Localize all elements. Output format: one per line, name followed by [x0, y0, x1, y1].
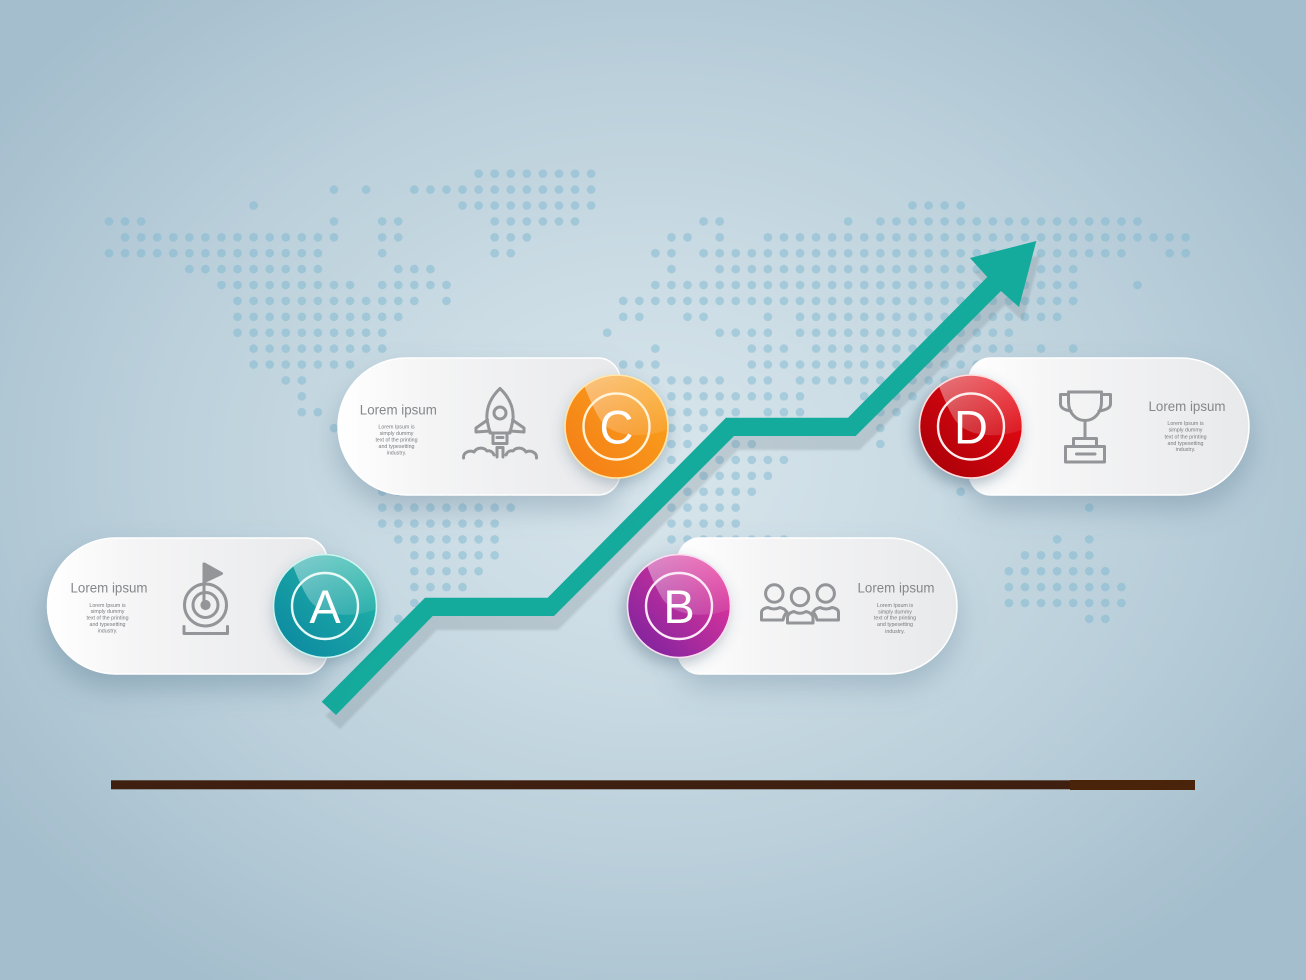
- panel: step B: [622, 538, 959, 688]
- badge A: [273, 554, 377, 664]
- icon: trophy: [1060, 392, 1110, 462]
- growth arrow: [322, 241, 1036, 715]
- badge C: C: [600, 400, 633, 454]
- body text A: text of the printing: [86, 616, 129, 622]
- card B: [678, 538, 957, 674]
- body text C: and typesetting: [379, 444, 415, 450]
- icon: target with flag: [184, 564, 228, 634]
- badge C: [564, 375, 668, 484]
- body text B: industry.: [885, 629, 905, 635]
- badge B: [622, 554, 731, 665]
- body text D: simply dummy: [1169, 428, 1203, 434]
- heading D: Lorem ipsum: [1148, 398, 1226, 414]
- body text B: and typesetting: [877, 622, 913, 628]
- icon: team of people: [762, 585, 838, 623]
- arrow shadow: [326, 255, 1040, 729]
- body text D: industry.: [1176, 447, 1195, 453]
- card A: [47, 538, 327, 674]
- panel: step D: [914, 358, 1251, 509]
- card D: [969, 358, 1249, 495]
- badge B: B: [663, 580, 695, 633]
- body text D: and typesetting: [1168, 441, 1204, 447]
- badge D: D: [954, 400, 988, 454]
- body text B: simply dummy: [878, 609, 912, 615]
- world map dots: [109, 174, 1187, 619]
- body text B: Lorem Ipsum is: [877, 603, 913, 609]
- heading B: Lorem ipsum: [858, 580, 934, 596]
- heading A: Lorem ipsum: [70, 580, 148, 596]
- body text A: and typesetting: [90, 622, 126, 628]
- body text B: text of the printing: [874, 616, 916, 622]
- badge A: A: [309, 580, 341, 633]
- card C: [338, 358, 620, 495]
- body text C: simply dummy: [380, 431, 414, 437]
- icon: rocket: [463, 388, 537, 458]
- body text A: industry.: [98, 628, 117, 634]
- body text C: Lorem Ipsum is: [378, 424, 415, 430]
- baseline bar: [111, 780, 1195, 790]
- panel: step C: [336, 358, 668, 509]
- body text C: text of the printing: [375, 438, 418, 444]
- heading C: Lorem ipsum: [360, 402, 437, 418]
- body text A: simply dummy: [91, 609, 125, 615]
- badge D: [914, 375, 1023, 486]
- body text D: text of the printing: [1164, 434, 1207, 440]
- body text A: Lorem Ipsum is: [89, 603, 126, 609]
- body text D: Lorem Ipsum is: [1167, 421, 1204, 427]
- panel: step A: [45, 538, 377, 688]
- body text C: industry.: [387, 450, 406, 456]
